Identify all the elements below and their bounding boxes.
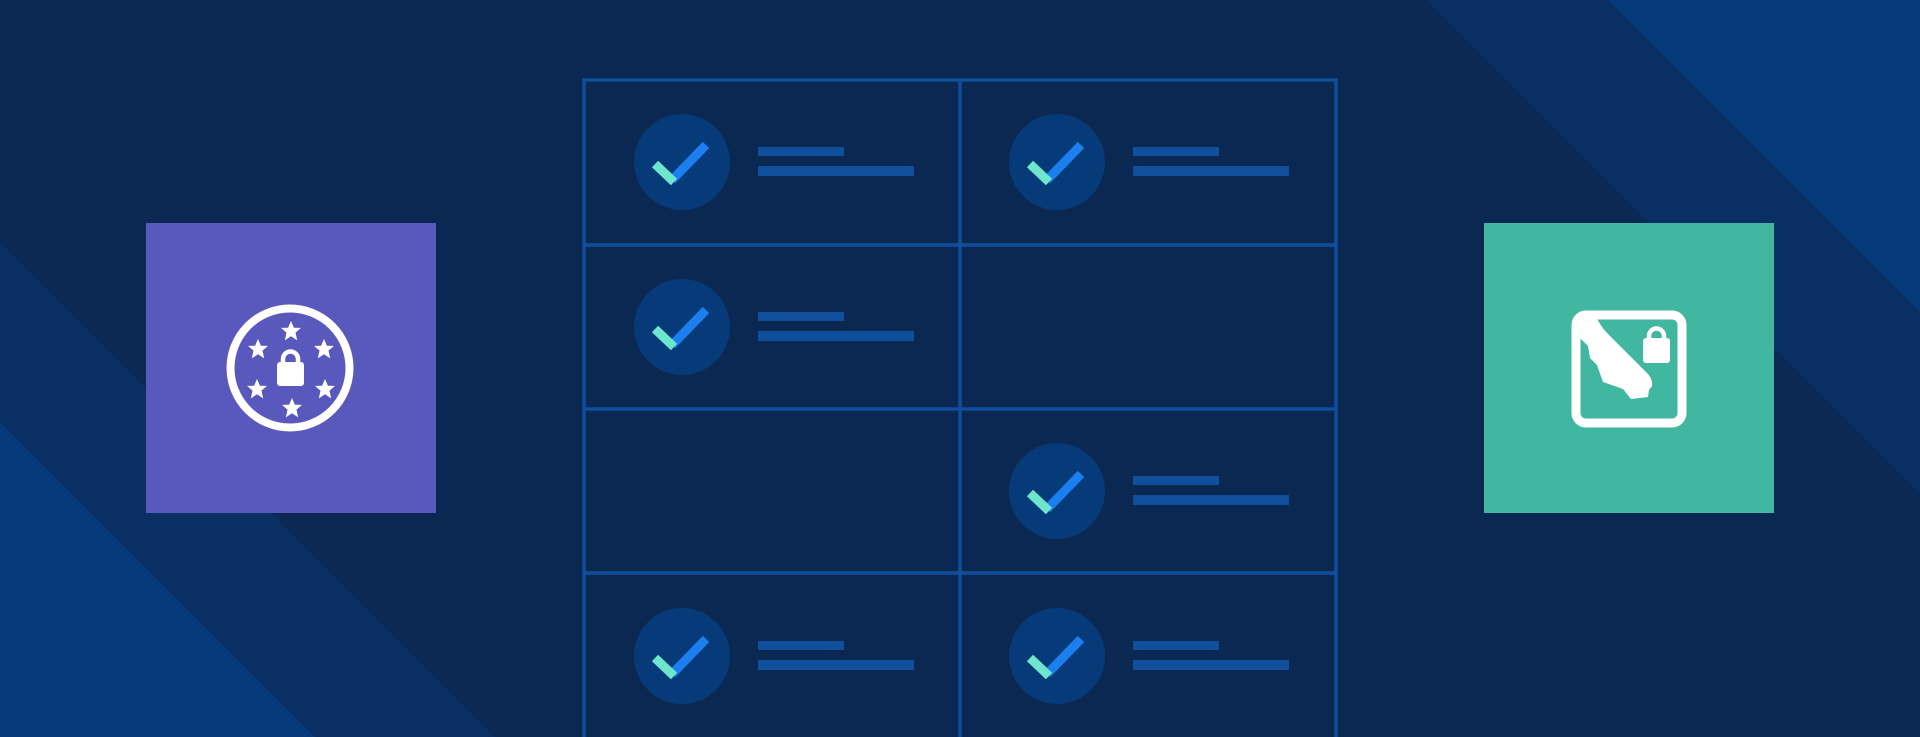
grid table xyxy=(584,80,1336,737)
panel: EU privacy icon xyxy=(146,223,436,513)
panel: California privacy icon xyxy=(1484,223,1774,513)
background stripe top-right xyxy=(1425,0,1920,495)
checklist items xyxy=(634,114,1289,704)
background stripe bottom-left xyxy=(0,241,496,737)
